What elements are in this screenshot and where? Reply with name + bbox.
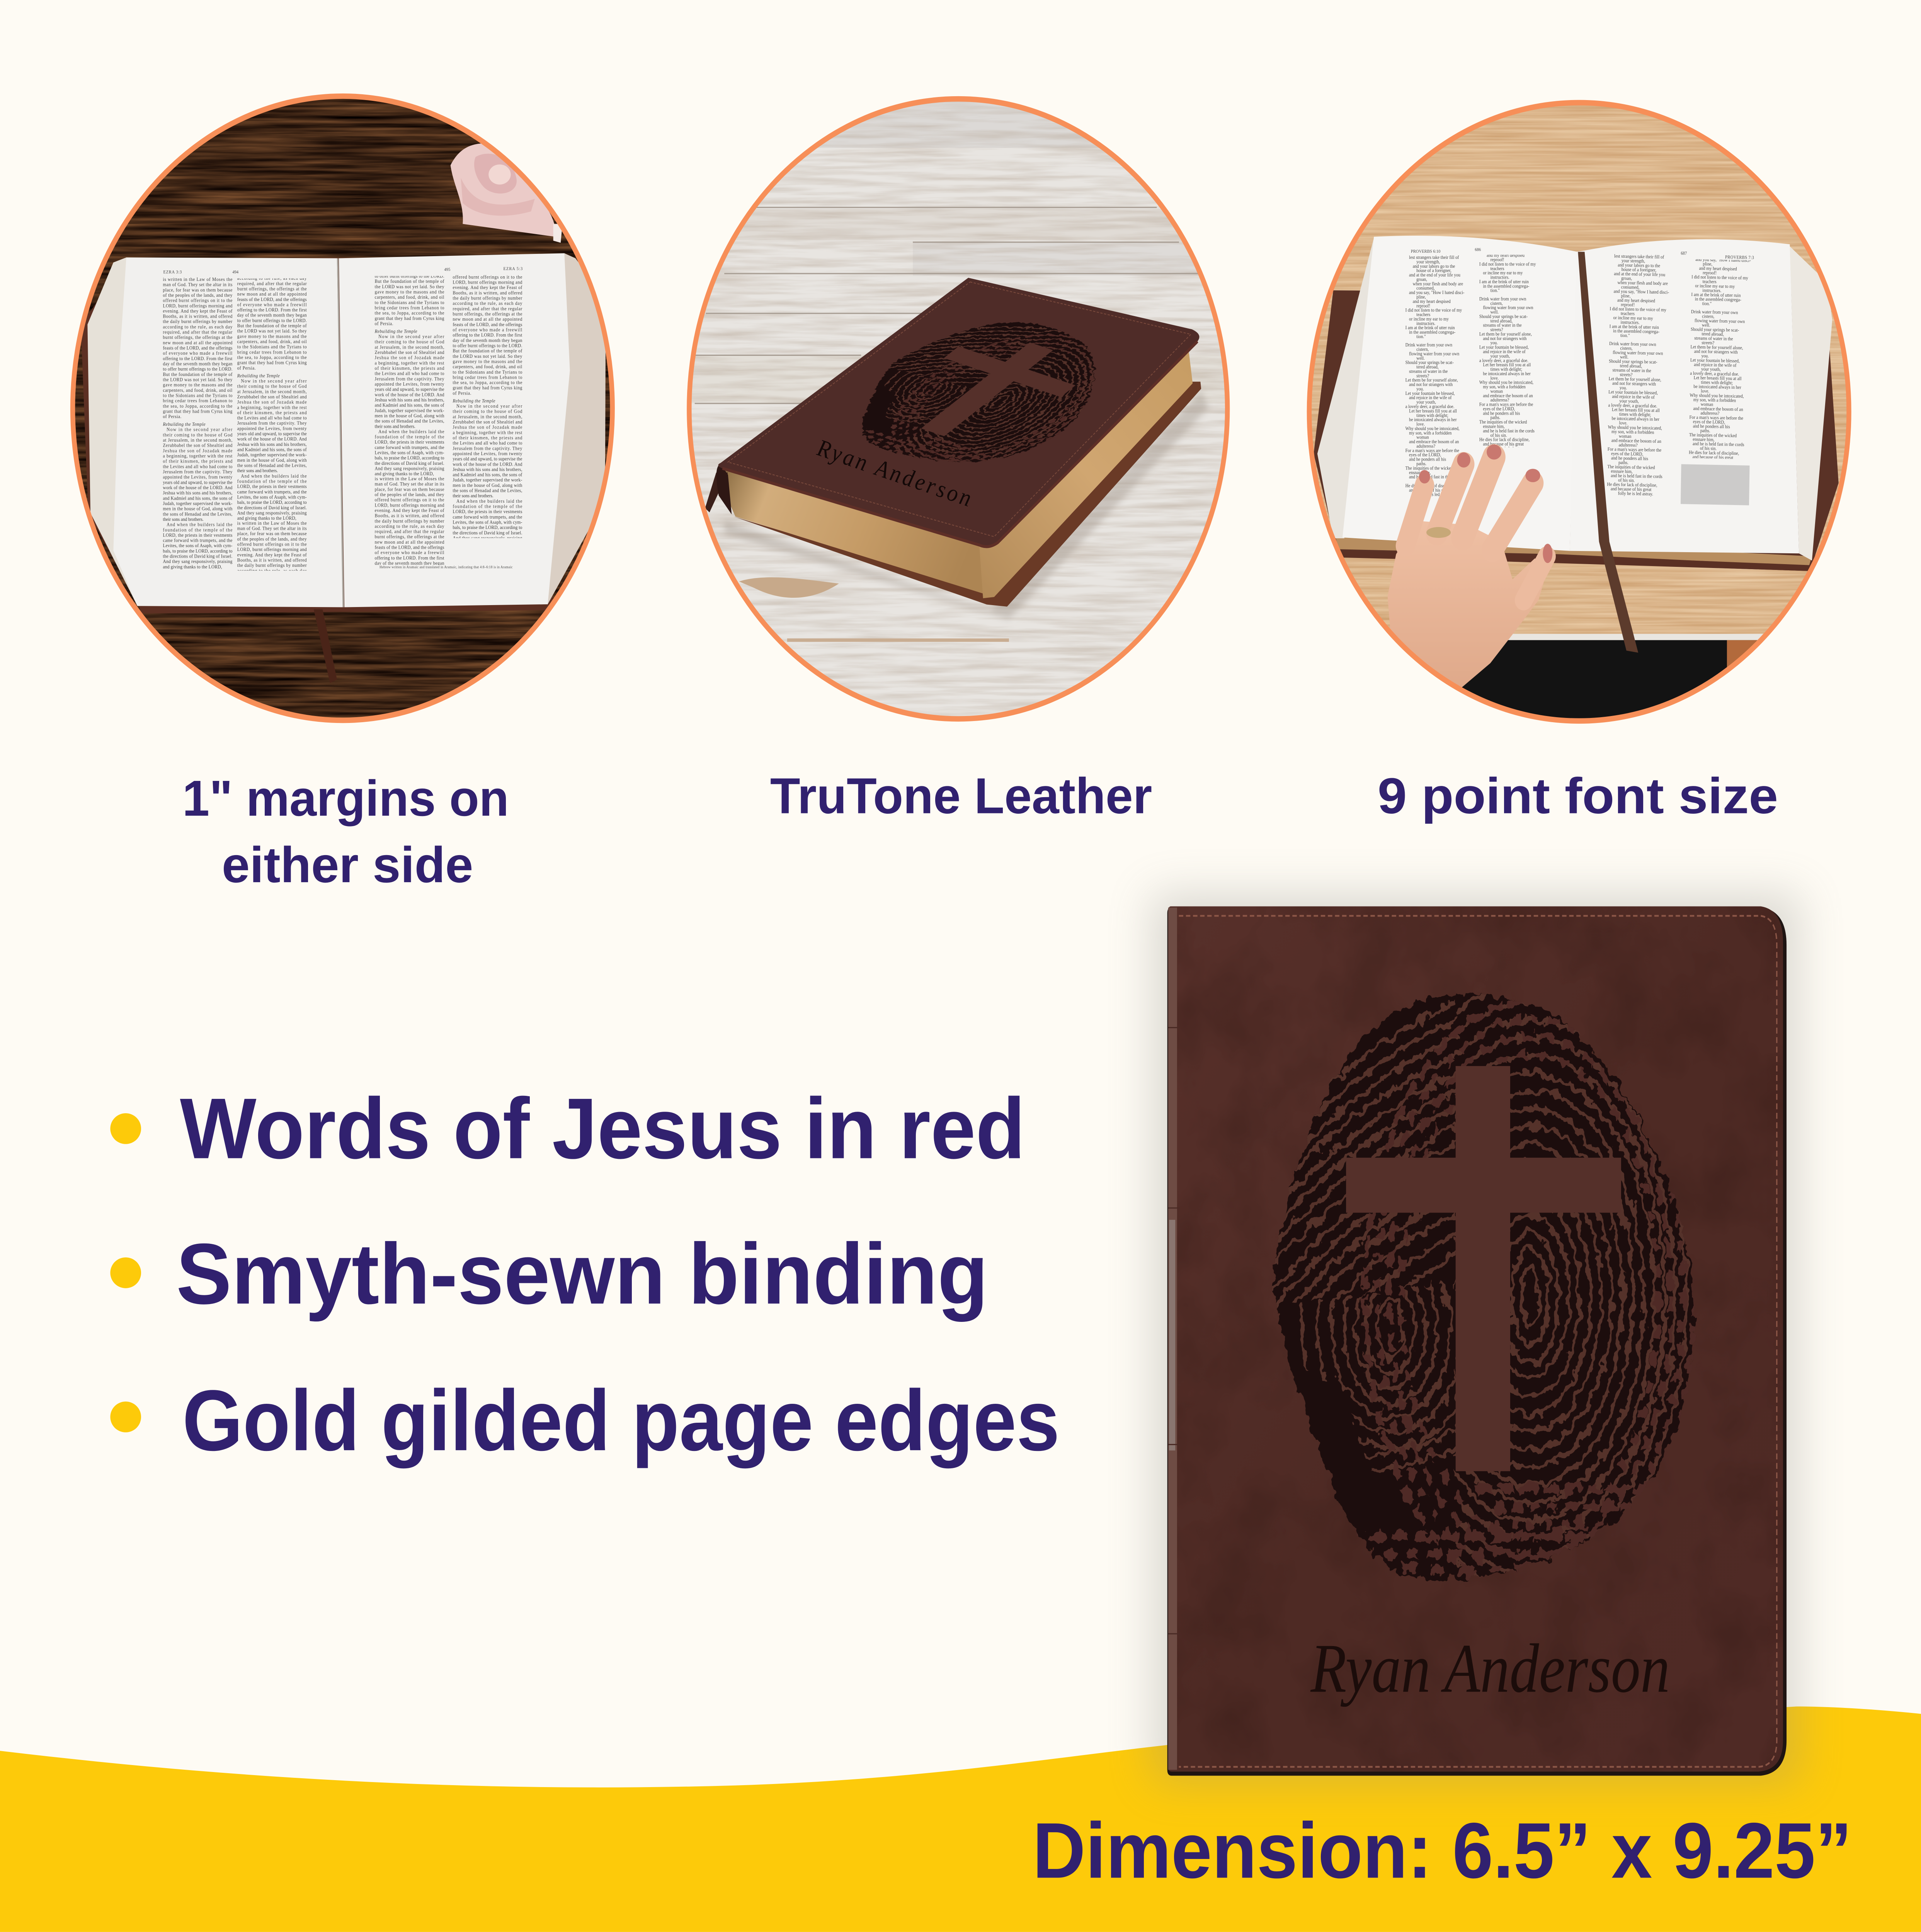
left page	[113, 257, 343, 607]
cover soft shadow	[1152, 893, 1799, 1783]
tan page underside	[1335, 536, 1812, 566]
feature: words of Jesus: Words of Jesus in red	[180, 1080, 1025, 1177]
cover base	[1167, 908, 1787, 1776]
right page text	[374, 184, 523, 838]
right page block	[1790, 247, 1832, 561]
caption: leather: TruTone Leather	[770, 768, 1152, 824]
woman's hand	[1388, 444, 1552, 688]
brown band under book	[1342, 551, 1810, 571]
top cover	[718, 278, 1199, 547]
orange ring	[1309, 103, 1849, 721]
ribbon marker	[705, 473, 728, 512]
right page text: 687	[1681, 251, 1687, 256]
orange ring	[689, 99, 1227, 719]
stitching	[1179, 916, 1777, 1767]
right page	[339, 253, 570, 607]
soft book shadow	[724, 391, 1208, 619]
brown cover beneath book	[1314, 290, 1839, 571]
left page text	[1405, 209, 1538, 497]
lower cover	[733, 382, 1201, 607]
bullet: binding	[110, 1257, 141, 1288]
gilded page edge, side	[979, 347, 1193, 598]
book gutter	[338, 258, 343, 607]
feature: gilded edges: Gold gilded page edges	[182, 1372, 1060, 1469]
feature: binding: Smyth-sewn binding	[176, 1226, 988, 1322]
ribbon marker	[314, 609, 337, 683]
right page	[1570, 239, 1799, 553]
bullet: gilded	[110, 1401, 141, 1432]
left page text	[163, 228, 307, 813]
embossed fingerprint and cross	[1264, 977, 1708, 1609]
whitewashed planks	[676, 85, 1256, 742]
dimension label: Dimension: 6.5” x 9.25”	[1033, 1807, 1852, 1895]
oak table	[1295, 85, 1875, 745]
gilded page edge, fore	[722, 464, 994, 597]
cover edge under the book	[81, 257, 553, 614]
left page block	[1317, 238, 1374, 538]
engraved name: Ryan Anderson	[814, 434, 974, 512]
pink rose	[451, 143, 563, 243]
wood table	[75, 99, 610, 718]
ribbon marker	[1578, 252, 1638, 653]
right page text: 495	[444, 267, 451, 272]
cover spine end	[716, 464, 732, 514]
engraved name: Ryan Anderson	[1310, 1630, 1670, 1707]
left page text: 686	[1475, 247, 1481, 252]
caption: font size: 9 point font size	[1378, 768, 1778, 824]
left page text: PROVERBS 6:10	[1411, 249, 1441, 254]
bullet: red letter	[110, 1113, 141, 1144]
embossed fingerprint and cross	[803, 296, 1161, 493]
photo circle: TruTone leather bible on whitewashed wood	[676, 85, 1256, 742]
photo circle: open bible with hand showing font size	[1295, 85, 1875, 745]
right page text: Hebrew written in Aramaic and translated in Aramaic, indicating that 4:8–6:18 is in Aramaic	[379, 565, 512, 569]
caption: margins	[182, 770, 509, 893]
right page text	[1607, 220, 1754, 505]
leather surface	[1168, 906, 1783, 1772]
left page text: 494	[232, 270, 238, 275]
leather mottling	[1168, 906, 1785, 1773]
spine edge	[1168, 908, 1180, 1770]
photo circle: open bible showing margins	[70, 94, 615, 723]
left page block	[87, 257, 138, 606]
caption: margins: 1" margins on	[182, 770, 509, 827]
orange ring	[73, 96, 613, 720]
caption: margins: either side	[222, 837, 473, 893]
right page text: PROVERBS 7:3	[1725, 255, 1754, 260]
yellow wave footer	[0, 1706, 1921, 1932]
right page text: EZRA 5:3	[504, 266, 523, 271]
left page	[1342, 236, 1577, 551]
bible front cover	[1167, 906, 1787, 1776]
left page text: EZRA 3:3	[163, 270, 182, 275]
right page block	[548, 253, 606, 604]
feature list	[110, 1080, 1060, 1469]
